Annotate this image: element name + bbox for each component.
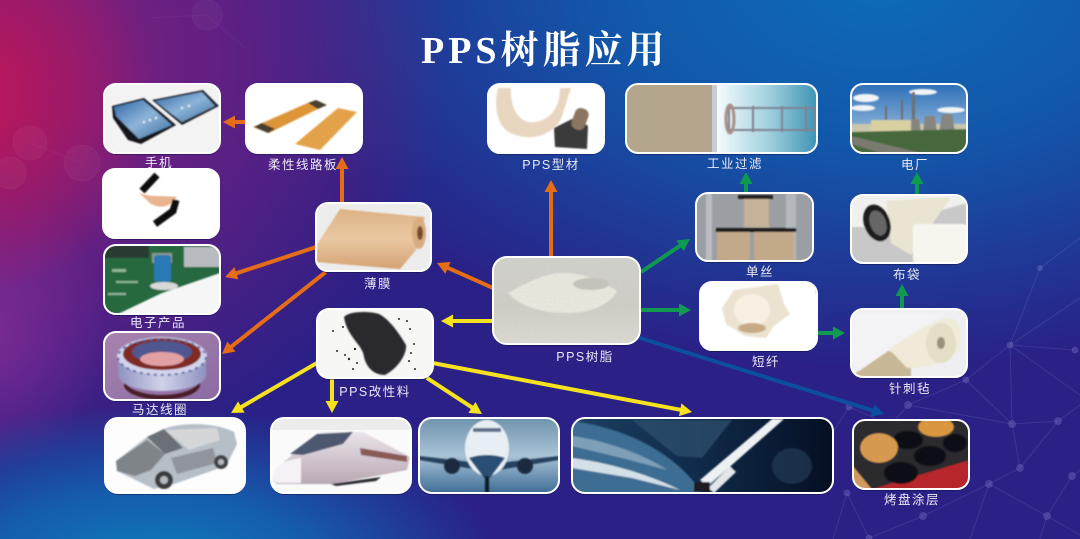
- panel: PPS改性料: [317, 309, 433, 399]
- title: PPS树脂应用: [421, 30, 669, 72]
- panel: 连接排线: [103, 169, 219, 240]
- label: 单丝: [746, 265, 774, 279]
- background network pattern: [828, 238, 1080, 539]
- panel: 柔性线路板: [246, 84, 362, 172]
- label: PPS型材: [522, 158, 580, 172]
- label: 布袋: [893, 268, 921, 282]
- arrow: 针刺毡 to 布袋: [896, 284, 908, 309]
- panel: PPS型材: [488, 84, 604, 172]
- panel: 烤盘涂层: [853, 417, 969, 507]
- arrow: 树脂 to 单丝: [637, 234, 694, 277]
- arrow: 树脂 to 型材: [544, 180, 558, 257]
- label: 烤盘涂层: [884, 492, 940, 507]
- label: 手机: [145, 156, 173, 170]
- label: 柔性线路板: [268, 157, 338, 172]
- arrow: 薄膜 to 柔性线路板: [336, 157, 348, 203]
- label: 马达线圈: [132, 403, 188, 417]
- arrow: 改性料 to 飞机: [423, 372, 486, 419]
- arrow: 树脂 to 改性料: [441, 314, 493, 328]
- panel: 手机: [104, 84, 220, 170]
- panel: 单丝: [696, 193, 813, 279]
- arrow: 树脂 to 短纤: [641, 304, 691, 316]
- panel: 火箭: [572, 418, 833, 495]
- panel: 电厂: [851, 84, 967, 172]
- arrow: 薄膜 to 电子产品: [223, 241, 318, 283]
- arrow: 薄膜 to 马达线圈: [218, 267, 330, 359]
- arrow: 改性料 to 汽车: [228, 357, 321, 419]
- arrow: 改性料 to 高铁: [326, 378, 338, 413]
- panel: 高铁: [271, 418, 411, 495]
- arrow: 布袋 to 电厂: [910, 172, 924, 195]
- label: 针刺毡: [889, 381, 931, 396]
- panel: 短纤: [700, 282, 817, 369]
- panel: 工业过滤: [626, 84, 817, 171]
- panel: 薄膜: [316, 203, 432, 291]
- label: 工业过滤: [707, 157, 763, 171]
- panel: 布袋: [851, 195, 967, 282]
- arrow: 树脂 to 烤盘涂层: [638, 332, 886, 420]
- panel: 针刺毡: [851, 309, 967, 396]
- label: 短纤: [752, 355, 780, 369]
- arrow: 单丝 to 工业过滤: [740, 172, 752, 193]
- arrow: 树脂 to 薄膜: [434, 257, 495, 294]
- panel: 飞机: [419, 418, 559, 495]
- arrow: 短纤 to 针刺毡: [817, 326, 845, 340]
- label: PPS改性料: [339, 385, 411, 399]
- panel: PPS树脂: [493, 257, 640, 364]
- arrow: 柔性线路板 to 手机: [223, 116, 246, 128]
- arrow: 改性料 to 火箭: [431, 357, 693, 418]
- panel: 汽车: [105, 418, 245, 495]
- label: 薄膜: [364, 276, 392, 291]
- label: PPS树脂: [556, 349, 614, 364]
- label: 电子产品: [130, 316, 186, 330]
- label: 电厂: [901, 158, 929, 172]
- panel: 马达线圈: [104, 332, 220, 417]
- panel: 电子产品: [104, 245, 220, 330]
